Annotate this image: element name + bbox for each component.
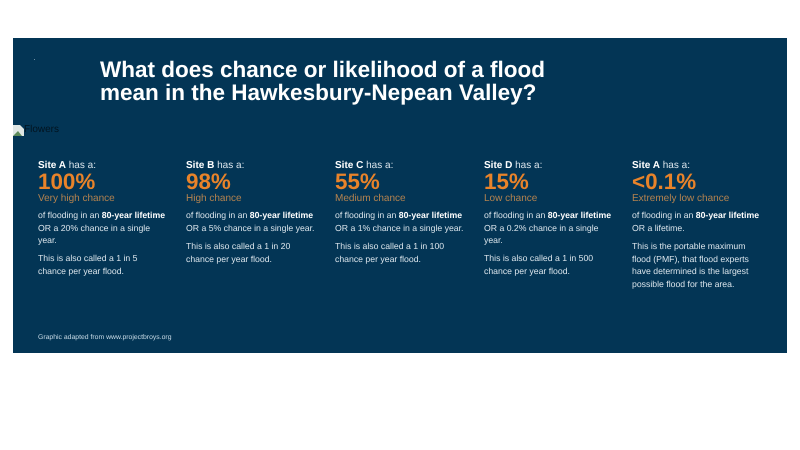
text: year.	[484, 235, 503, 245]
text: OR a 0.2% chance in a single	[484, 223, 598, 233]
icon: small dot	[34, 59, 35, 60]
text: Extremely low chance	[632, 193, 729, 204]
text: chance per year flood.	[38, 266, 124, 276]
text: of flooding in an 80-year lifetime	[38, 210, 165, 220]
panel: site B 98%	[186, 160, 314, 264]
text: This is also called a 1 in 500	[484, 253, 593, 263]
text: Site C has a:	[335, 160, 393, 171]
text: This is also called a 1 in 5	[38, 253, 137, 263]
text: Very high chance	[38, 193, 115, 204]
text: 55%	[335, 169, 380, 194]
text: Site A has a:	[38, 160, 96, 171]
text: Site B has a:	[186, 160, 244, 171]
text: 15%	[484, 169, 529, 194]
text: have determined is the largest	[632, 266, 748, 276]
text: OR a 5% chance in a single year.	[186, 223, 314, 233]
title: mean in the Hawkesbury-Nepean Valley?	[100, 80, 536, 105]
text: of flooding in an 80-year lifetime	[632, 210, 759, 220]
panel: site A 100%	[38, 160, 165, 276]
text: OR a 1% chance in a single year.	[335, 223, 463, 233]
broken image placeholder	[13, 124, 59, 136]
panel: site D 15%	[484, 160, 611, 276]
text: This is also called a 1 in 100	[335, 241, 444, 251]
panel: site A less than 0.1%	[632, 160, 759, 289]
text: of flooding in an 80-year lifetime	[186, 210, 313, 220]
text: chance per year flood.	[186, 254, 272, 264]
text: <0.1%	[632, 169, 696, 194]
text: flood (PMF), that flood experts	[632, 254, 749, 264]
text: 100%	[38, 169, 95, 194]
broken image placeholder: Flowers	[24, 124, 59, 135]
text: This is the portable maximum	[632, 241, 745, 251]
credit text: Graphic adapted from www.projectbroys.org	[38, 334, 172, 341]
text: 98%	[186, 169, 231, 194]
text: OR a 20% chance in a single	[38, 223, 150, 233]
title	[100, 57, 545, 105]
panel: site C 55%	[335, 160, 463, 264]
text: possible flood for the area.	[632, 279, 734, 289]
title: What does chance or likelihood of a flood	[100, 57, 545, 82]
text: of flooding in an 80-year lifetime	[484, 210, 611, 220]
text: This is also called a 1 in 20	[186, 241, 290, 251]
text: of flooding in an 80-year lifetime	[335, 210, 462, 220]
text: year.	[38, 235, 57, 245]
text: chance per year flood.	[335, 254, 421, 264]
text: Site A has a:	[632, 160, 690, 171]
panel: background	[13, 38, 787, 353]
text: High chance	[186, 193, 242, 204]
text: chance per year flood.	[484, 266, 570, 276]
text: OR a lifetime.	[632, 223, 685, 233]
text: Medium chance	[335, 193, 406, 204]
text: Low chance	[484, 193, 537, 204]
text: Site D has a:	[484, 160, 542, 171]
